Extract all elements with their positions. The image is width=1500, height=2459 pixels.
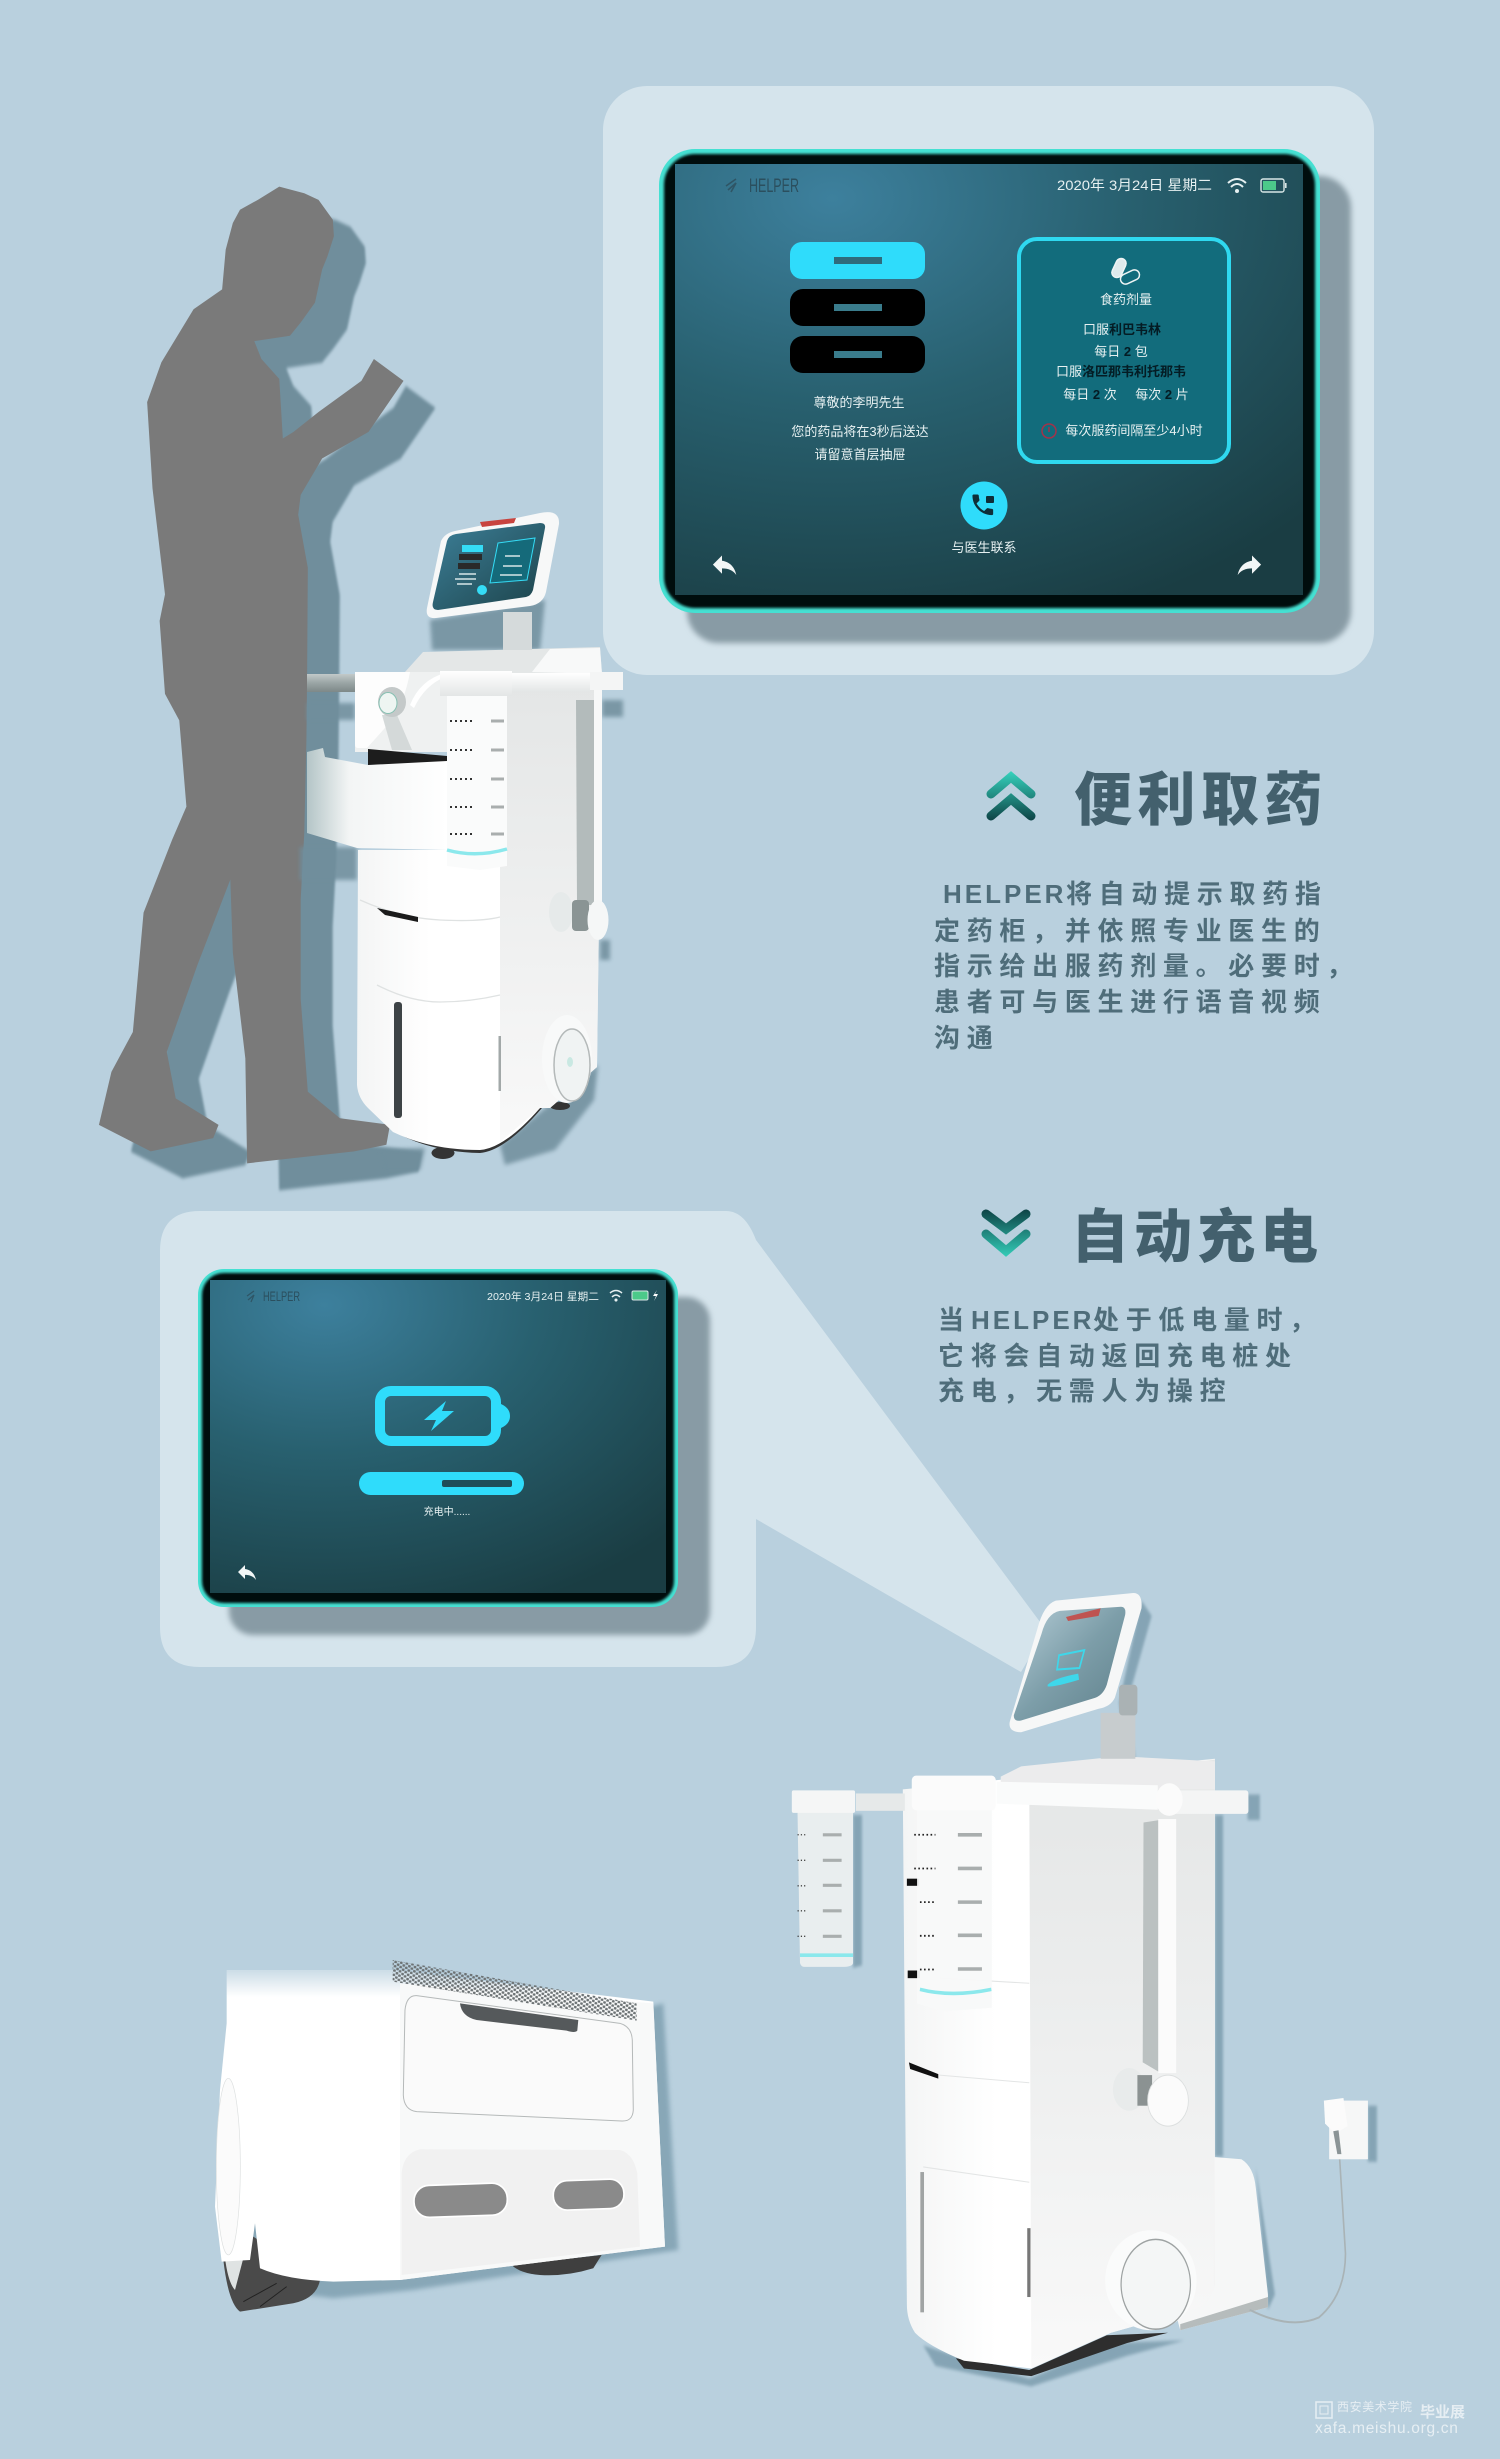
icon: wifi: [610, 1290, 622, 1301]
top rail: [512, 672, 623, 692]
tablet screen: medicine pickup: [659, 149, 1351, 643]
robot: charging view: [792, 1593, 1377, 2386]
charging dock: [1168, 2157, 1268, 2330]
watermark label: 毕业展: [1420, 2404, 1465, 2421]
logo text: [247, 1288, 300, 1304]
dosage text: 每日 2 包: [1094, 344, 1148, 359]
logo text: HELPER: [263, 1288, 300, 1304]
icon: pills: [1110, 257, 1141, 286]
icon: forward arrow: [1238, 556, 1261, 575]
robot body: [357, 690, 602, 1150]
drawer selector: [790, 242, 925, 373]
greeting message: 您的药品将在3秒后送达: [791, 424, 929, 439]
right arm: [1143, 1819, 1176, 2073]
logo text: [726, 176, 799, 197]
robot tablet: [427, 512, 559, 618]
right arm: [576, 690, 602, 905]
person silhouette: [99, 187, 404, 1163]
icon: battery: [1261, 179, 1287, 192]
sensor window right: [553, 2179, 624, 2211]
dosage text: 口服利巴韦林: [1083, 322, 1161, 337]
text block: pickup description: 将自动提示取药指: [1066, 879, 1328, 909]
robot cast shadows: [300, 600, 623, 1170]
watermark: [1315, 2399, 1465, 2437]
wheel hub: [216, 2078, 240, 2255]
icon: large battery with bolt: [380, 1391, 510, 1441]
text block: charging description: 处于低电量时，: [1093, 1305, 1322, 1335]
access panel: [403, 1996, 633, 2121]
sensor window left: [413, 2183, 508, 2218]
icon: wifi: [1228, 179, 1246, 192]
heading icon: up chevrons: [991, 777, 1031, 816]
date: 2020年 3月24日 星期二: [1057, 177, 1212, 193]
wheels: [956, 2333, 1168, 2376]
panel: medicine screen callout: [603, 86, 1374, 675]
greeting message: 请留意首层抽屉: [814, 447, 906, 462]
icon: warning: [1042, 424, 1056, 438]
robot body: [903, 1759, 1215, 2368]
greeting message: 尊敬的李明先生: [813, 395, 905, 410]
right face: [500, 680, 602, 1142]
tablet screen: charging: [198, 1269, 710, 1635]
icon: back arrow: [238, 1565, 256, 1580]
drive wheel cover: [1105, 2230, 1197, 2330]
charging progress bar: [359, 1472, 524, 1495]
top plate: [1001, 1756, 1215, 1789]
heading icon: down chevrons: [986, 1214, 1026, 1251]
robot tablet: [1010, 1593, 1142, 1732]
text block: charging description: 当: [938, 1305, 971, 1335]
dosage text: 每日 2 次: [1063, 387, 1117, 402]
dosage text: 口服洛匹那韦利托那韦: [1056, 364, 1186, 379]
vent dots: [393, 1960, 637, 2021]
panel: charging screen callout: [160, 1211, 1046, 1672]
watermark school name: 西安美术学院: [1337, 2399, 1412, 2414]
detached medicine column: [792, 1790, 905, 1967]
drive wheel cover: [542, 1015, 592, 1103]
heading: convenient pickup: 便利取药: [1074, 753, 1328, 837]
greeting message: [791, 395, 929, 462]
text block: pickup description: 定药柜，并依照专业医生的: [934, 916, 1326, 946]
text block: pickup description: 患者可与医生进行语音视频: [934, 987, 1326, 1017]
front control box: [355, 672, 447, 752]
base body: [215, 1970, 665, 2282]
medicine column: [440, 671, 512, 870]
rear wheel: [512, 2255, 602, 2275]
wheels: [393, 1102, 570, 1159]
robot: medicine delivery view: [300, 512, 623, 1170]
date: 2020年 3月24日 星期二: [487, 1290, 599, 1303]
dosage text: [1056, 292, 1203, 438]
arm knob: [1113, 2068, 1188, 2126]
handle bar: [307, 674, 356, 692]
dosage text: 食药剂量: [1100, 292, 1152, 307]
text block: charging description: HELPER: [971, 1305, 1094, 1335]
front wheel: [223, 2237, 320, 2312]
watermark url: xafa.meishu.org.cn: [1315, 2420, 1459, 2437]
lower recess: [402, 2149, 640, 2275]
button: contact doctor: [951, 482, 1017, 555]
power cord: [1250, 2154, 1345, 2322]
person shadow: [131, 214, 436, 1190]
panel handle: [460, 2003, 578, 2032]
tablet post: [1101, 1685, 1137, 1759]
icon: back arrow: [713, 556, 736, 575]
body seams and slots: [360, 900, 501, 1118]
robot cast shadows: [853, 1601, 1377, 2386]
top rail: [997, 1782, 1248, 1816]
tablet post: [503, 612, 532, 650]
logo text: HELPER: [749, 176, 799, 197]
card: dosage: [1019, 239, 1229, 462]
medicine column: [912, 1776, 996, 2011]
arm knob: [549, 892, 608, 940]
text block: charging description: 充电，无需人为操控: [938, 1376, 1232, 1406]
top plate: [405, 647, 602, 674]
body seams and slots: [907, 1879, 1031, 2312]
text block: pickup description: HELPER: [943, 879, 1066, 909]
wall socket and plug: [1324, 2098, 1368, 2159]
dosage text: 每次 2 片: [1135, 387, 1189, 402]
text block: pickup description: [934, 879, 1359, 1053]
right face: [1029, 1760, 1215, 2368]
drawer tray: [307, 748, 447, 850]
text block: charging description: [938, 1305, 1322, 1406]
robot base close-up: [215, 1960, 678, 2312]
text block: charging description: 它将会自动返回充电桩处: [938, 1341, 1298, 1371]
heading: auto charging: 自动充电: [1071, 1190, 1323, 1274]
side face: [400, 1983, 665, 2280]
charging label: 充电中......: [424, 1505, 470, 1518]
text block: pickup description: 沟通: [934, 1023, 999, 1053]
dosage text: 每次服药间隔至少4小时: [1065, 423, 1203, 438]
icon: small battery charging: [632, 1290, 658, 1301]
watermark emblem: [1316, 2402, 1332, 2418]
button: contact doctor: 与医生联系: [951, 540, 1017, 555]
text block: pickup description: 指示给出服药剂量。必要时，: [934, 951, 1359, 981]
